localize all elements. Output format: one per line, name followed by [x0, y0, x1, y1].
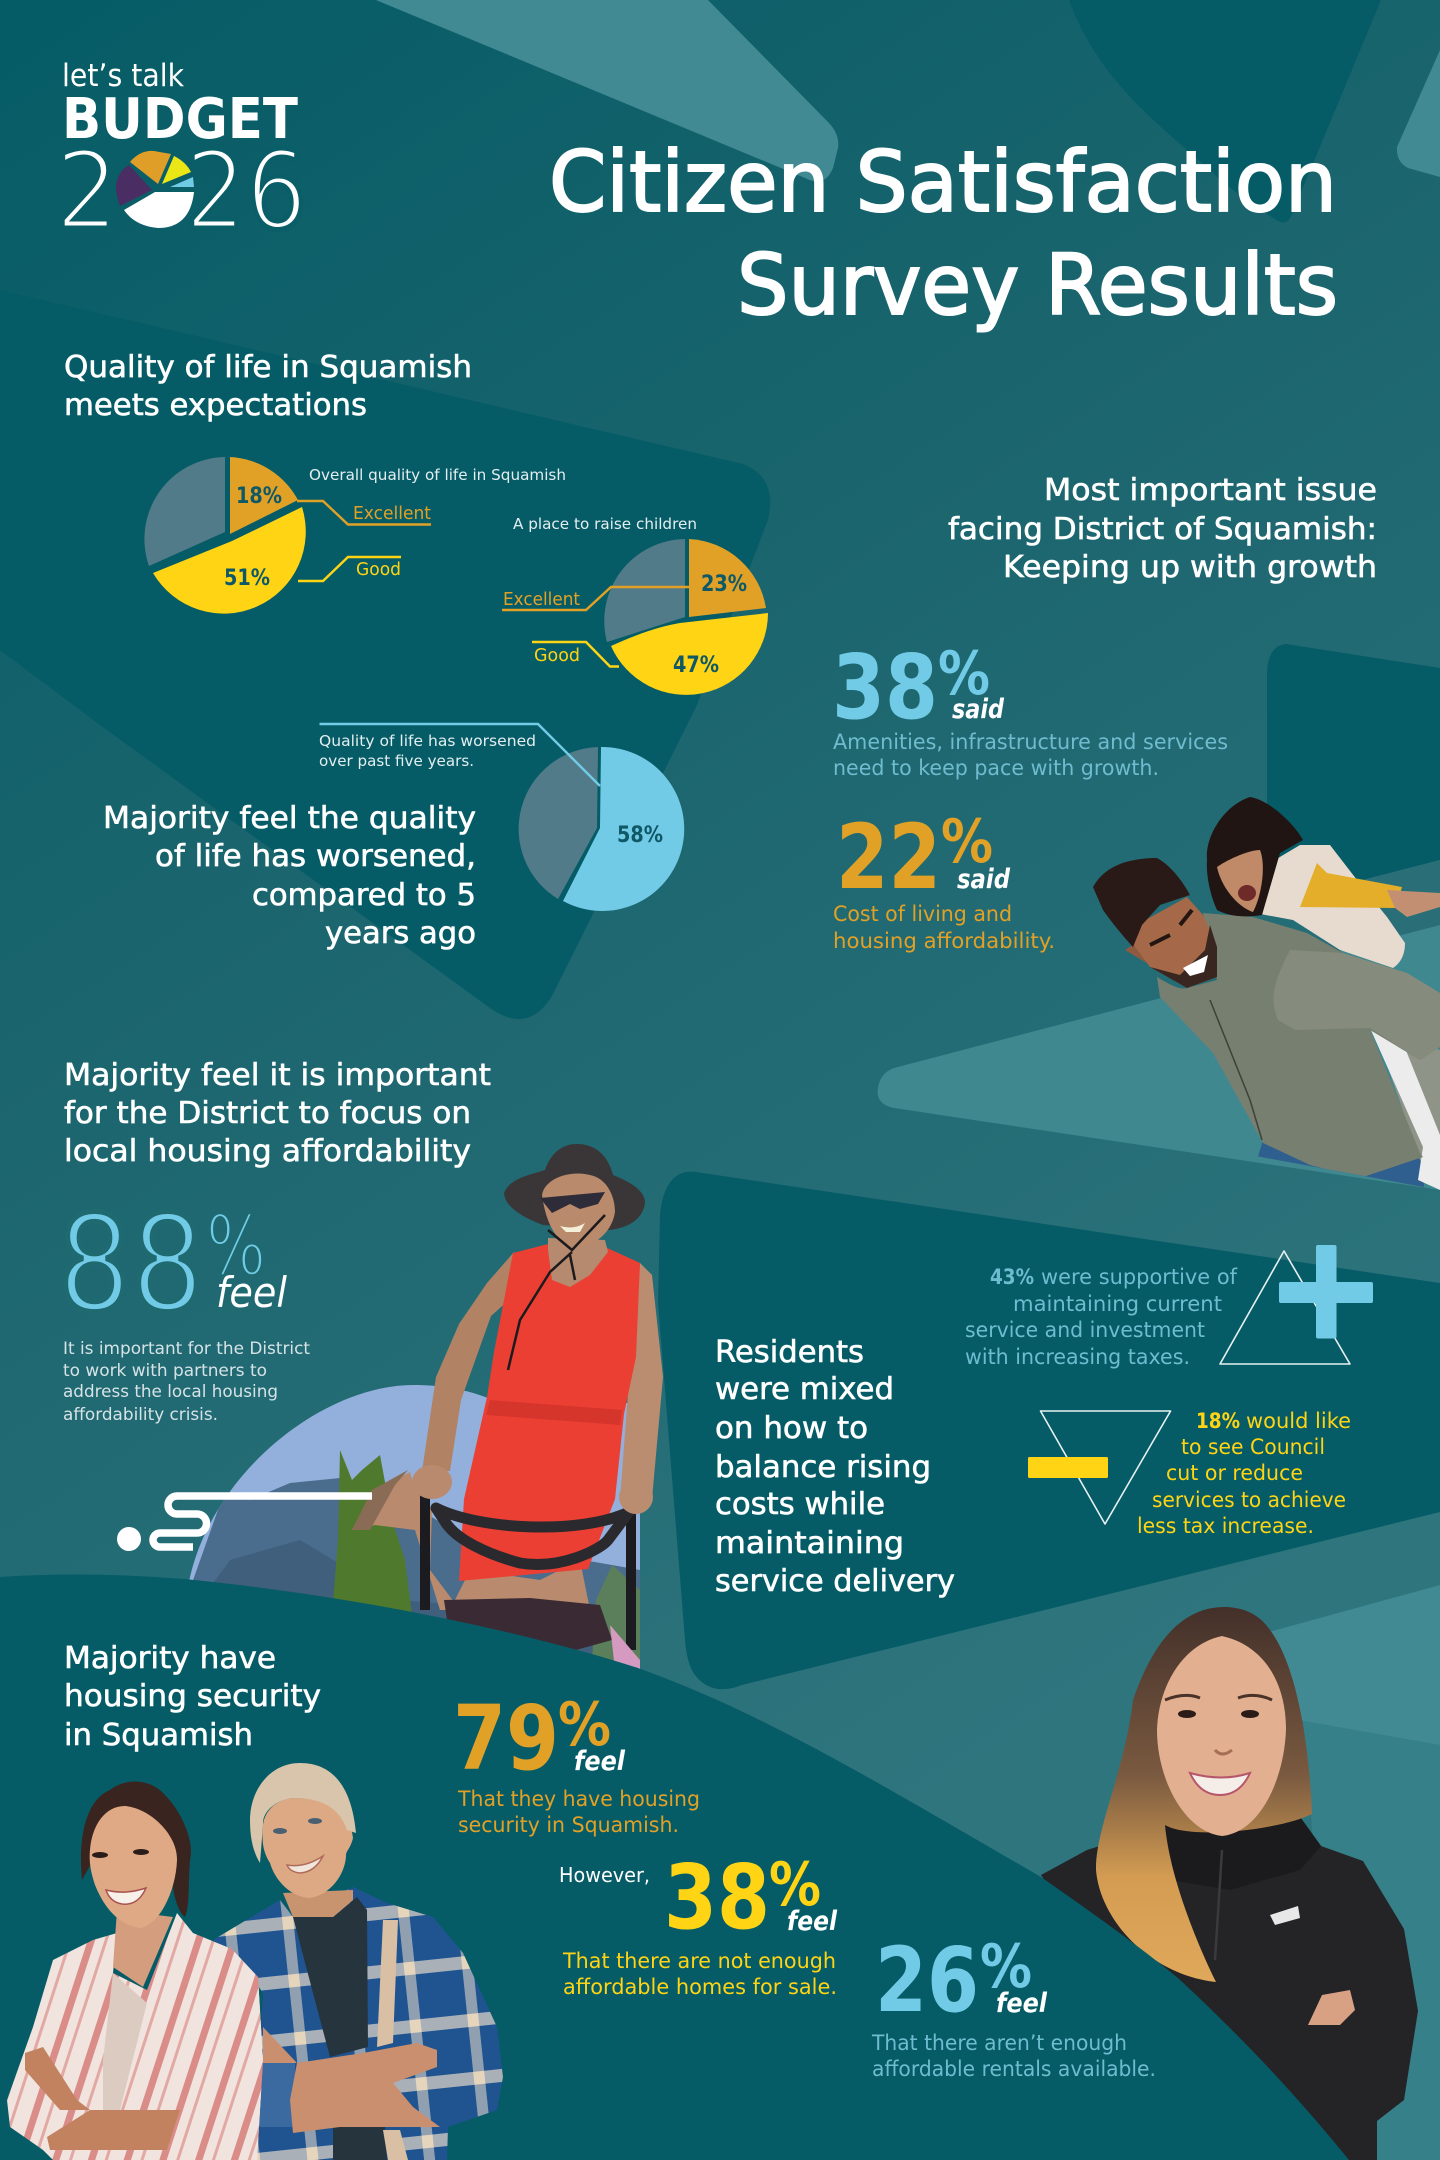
smile [560, 1223, 585, 1232]
chart: overall quality of life pie: 51% [224, 566, 270, 591]
chart: quality of life worsened pie [319, 724, 684, 911]
shape: top right light wedge [1397, 50, 1440, 177]
stat: 38% said: said [952, 694, 1005, 725]
title: Survey Results [737, 236, 1338, 334]
callout: 43% supportive: service and investment [965, 1318, 1205, 1342]
heading: most important issue [948, 473, 1377, 585]
nose shadow [1215, 1750, 1232, 1754]
heading: majority feel quality of life has worsened: Majority feel the quality [103, 801, 476, 836]
bottom dark wave panel [0, 1575, 1349, 2160]
stat: 26% feel [871, 1928, 1156, 2081]
heading: housing affordability focus: local housing affordability [64, 1134, 471, 1169]
shape: top light wedge [376, 0, 838, 181]
shape: top right dark wedge [1069, 0, 1381, 222]
chart: place to raise children pie: Good [534, 645, 580, 666]
hat cord [508, 1215, 605, 1370]
stat: 26% feel: feel [996, 1988, 1048, 2019]
woman's face [90, 1806, 177, 1928]
stat: 79% feel: feel [574, 1746, 626, 1777]
stat: 79% feel: security in Squamish. [458, 1813, 679, 1837]
hand [1308, 1990, 1355, 2025]
stat: 38% said: need to keep pace with growth. [833, 756, 1159, 780]
girl's vest [1255, 845, 1405, 968]
woman's neck [113, 1910, 173, 1987]
photo: father and daughter [1093, 797, 1440, 1190]
logo: let's talk budget 2026 [55, 58, 307, 254]
chart: quality of life worsened pie: 58% [617, 823, 663, 848]
heading: housing security: Majority have [64, 1641, 276, 1676]
stat: 22% said: housing affordability. [833, 929, 1055, 953]
man's shirt [1157, 913, 1440, 1178]
shape: right dark block [1267, 644, 1440, 905]
stat: however 38% feel [559, 1845, 838, 1999]
stat: however 38% feel: However, [559, 1863, 650, 1887]
woman's hair [81, 1782, 191, 1917]
stat: 26% feel: That there aren’t enough [871, 2031, 1127, 2055]
chart: overall quality of life pie: Good [356, 559, 401, 580]
shirt placket [377, 1920, 408, 2160]
woman's hand [25, 2047, 90, 2110]
callout: 43% supportive [965, 1265, 1238, 1369]
sunglasses [540, 1192, 605, 1213]
smile [1190, 1773, 1250, 1795]
neck and chest [548, 1238, 608, 1287]
stat: 38% said: % [938, 639, 990, 709]
shape: light wedge under stats [878, 925, 1440, 1190]
stat: 88% feel: feel [216, 1268, 287, 1317]
heading: majority feel quality of life has worsened: years ago [325, 916, 476, 951]
photo: woman in black hoodie [1041, 1607, 1418, 2160]
shape: quality of life dark panel [0, 290, 770, 1019]
callout: 18% cut or reduce: cut or reduce [1166, 1461, 1303, 1485]
man's t-shirt [293, 1897, 368, 2057]
stat: 22% said: Cost of living and [833, 902, 1012, 926]
heading: residents were mixed: costs while [715, 1487, 885, 1522]
shirt placket line [1210, 1000, 1262, 1140]
callout: 18% cut or reduce: to see Council [1181, 1435, 1325, 1459]
chart: quality of life worsened pie: Quality of life has worsened [319, 732, 536, 750]
stat: 22% said [833, 805, 1055, 953]
girl's hand [1387, 890, 1440, 917]
callout: 18% cut or reduce: less tax increase. [1137, 1514, 1314, 1538]
woman's tee [103, 1973, 147, 2110]
woman's forearm [47, 2110, 180, 2150]
drawstring [1215, 1850, 1222, 1960]
logo digits: 26: 26 [185, 129, 307, 254]
brows [1165, 1695, 1272, 1700]
heading: quality of life meets expectations [64, 350, 472, 423]
logo pie [116, 151, 194, 228]
eyes [1178, 1710, 1196, 1718]
man's neck [283, 1890, 353, 1917]
heading: housing affordability focus: Majority feel it is important [64, 1058, 491, 1093]
callout: 18% cut or reduce [1137, 1409, 1351, 1538]
dress waist shade [486, 1400, 622, 1425]
callout: 43% supportive: maintaining current [1013, 1292, 1222, 1316]
legs [450, 1560, 590, 1610]
man's sleeve highlight [1274, 950, 1440, 1060]
stat: 79% feel [453, 1686, 700, 1837]
girl's hair [1207, 797, 1303, 916]
logo mark [1270, 1906, 1300, 1925]
chart: overall quality of life pie: Excellent [353, 503, 431, 524]
stat: 88% feel: 88 [58, 1188, 204, 1342]
photo: woman and man with crossed arms [7, 1763, 503, 2160]
icon: minus in triangle [1028, 1411, 1171, 1524]
callout: 18% cut or reduce: would like [1246, 1409, 1351, 1433]
stat: 88% feel: % [206, 1197, 266, 1295]
title [549, 133, 1338, 334]
stat: however 38% feel: feel [787, 1906, 838, 1937]
heading: residents were mixed: service delivery [715, 1564, 955, 1599]
man's ear and face [1125, 945, 1148, 964]
heading: majority feel quality of life has worsened [103, 801, 476, 951]
chart: place to raise children pie: 47% [673, 653, 719, 678]
callout: 43% supportive: with increasing taxes. [965, 1345, 1190, 1369]
callout: 43% supportive: were supportive of [1041, 1265, 1238, 1289]
heading: majority feel quality of life has worsened: of life has worsened, [155, 839, 476, 874]
callout: 43% supportive: 43% [990, 1265, 1034, 1289]
stat: however 38% feel: That there are not enough [562, 1949, 836, 1973]
man's forearms [290, 2043, 440, 2133]
heading: housing security: in Squamish [64, 1718, 253, 1753]
stat: 79% feel: 79 [453, 1686, 559, 1790]
icon: white squiggle line and dot [117, 1496, 372, 1551]
stat: 38% said [832, 635, 1228, 780]
stat: however 38% feel: affordable homes for sale. [563, 1975, 837, 1999]
hoodie [1041, 1814, 1418, 2160]
man's smile [1183, 955, 1208, 976]
man's cuff and hand [257, 2063, 295, 2127]
stat: 88% feel: address the local housing [63, 1382, 278, 1402]
heading: housing security: housing security [64, 1679, 321, 1714]
sun hat [504, 1144, 645, 1230]
scenery: sky, mountains and trees [190, 1385, 640, 1660]
stat: 26% feel: affordable rentals available. [872, 2057, 1156, 2081]
heading: housing security [64, 1641, 321, 1753]
stat: 26% feel: 26 [875, 1928, 979, 2032]
face [1157, 1636, 1286, 1836]
arms [422, 1252, 520, 1471]
stat: 88% feel: affordability crisis. [63, 1405, 218, 1425]
heading: residents were mixed: Residents [715, 1335, 864, 1370]
heading: housing affordability focus: for the District to focus on [64, 1096, 471, 1131]
heading: majority feel quality of life has worsened: compared to 5 [252, 878, 476, 913]
heading: most important issue: Most important issue [1044, 473, 1377, 508]
man's eyes and smile [273, 1828, 287, 1834]
shape: lower right light wedge [1240, 1585, 1440, 1745]
chart: place to raise children pie: A place to raise children [513, 515, 697, 533]
girl's leg and shoe [1370, 1028, 1440, 1190]
girl's face [1217, 850, 1263, 912]
chart: overall quality of life pie: Overall quality of life in Squamish [309, 466, 566, 484]
callout: 18% cut or reduce: 18% [1196, 1409, 1240, 1433]
shape: lower right mid wedge [1303, 1721, 1440, 2160]
logo text: let's talk: let’s talk [62, 58, 184, 94]
man's beard [1150, 925, 1217, 988]
chart: place to raise children pie [502, 515, 768, 695]
raised foot [352, 1472, 460, 1610]
callout: 18% cut or reduce: services to achieve [1152, 1488, 1346, 1512]
shape: mid band right [1300, 860, 1440, 960]
hood [1165, 1814, 1321, 1890]
heading: housing affordability focus [64, 1058, 491, 1169]
stat: 88% feel [58, 1188, 310, 1425]
photo: woman with walker [186, 1144, 663, 1690]
heading: residents were mixed: were mixed [715, 1372, 894, 1407]
title: Citizen Satisfaction [549, 133, 1337, 231]
chart: overall quality of life pie: 18% [236, 484, 282, 509]
beanie [250, 1763, 356, 1863]
stat: 38% said: Amenities, infrastructure and services [833, 730, 1228, 754]
walker seat [444, 1598, 612, 1660]
long hair [1096, 1607, 1312, 1982]
jeans [1258, 1142, 1424, 1187]
walker frame [425, 1486, 631, 1650]
hands [412, 1465, 452, 1499]
shape: residents dark panel [658, 1172, 1440, 1689]
girl's open mouth [1238, 885, 1256, 901]
stat: 22% said: % [941, 807, 993, 877]
heading: quality of life meets expectations: Quality of life in Squamish [64, 350, 472, 385]
man's back behind leg [1389, 1049, 1440, 1162]
chart: place to raise children pie: 23% [701, 572, 747, 597]
girl's shirt sleeve [1300, 863, 1402, 908]
face [542, 1174, 615, 1247]
stat: 38% said: 38 [832, 635, 938, 739]
man's face [263, 1798, 353, 1898]
heading: quality of life meets expectations: meets expectations [64, 388, 367, 423]
man's brows [1150, 910, 1192, 945]
logo text: budget: BUDGET [62, 87, 298, 152]
woman's sleeve [120, 1947, 263, 2160]
stat: 79% feel: % [558, 1690, 611, 1760]
heading: most important issue: Keeping up with growth [1003, 550, 1377, 585]
icon: plus in triangle [1220, 1245, 1373, 1364]
heading: residents were mixed: on how to [715, 1411, 868, 1446]
stat: 79% feel: That they have housing [457, 1787, 700, 1811]
stat: 26% feel: % [980, 1932, 1032, 2002]
heading: most important issue: facing District of Squamish: [948, 512, 1377, 547]
heading: residents were mixed: maintaining [715, 1526, 904, 1561]
red dress [459, 1244, 640, 1581]
woman's striped shirt [7, 1913, 263, 2160]
stat: however 38% feel: % [769, 1850, 821, 1920]
logo digit: 2: 2 [55, 129, 119, 254]
heading: residents were mixed [715, 1335, 955, 1599]
stat: 88% feel: It is important for the District [63, 1339, 310, 1359]
chart: place to raise children pie: Excellent [503, 589, 580, 610]
man's hair [1093, 858, 1190, 947]
stat: 22% said: 22 [836, 805, 941, 909]
chart: overall quality of life pie [144, 457, 566, 614]
heading: residents were mixed: balance rising [715, 1450, 931, 1485]
stat: 22% said: said [957, 864, 1011, 895]
woman's eyes and smile [92, 1852, 108, 1858]
chart: quality of life worsened pie: over past five years. [319, 752, 474, 770]
stat: 88% feel: to work with partners to [63, 1361, 267, 1381]
stat: however 38% feel: 38 [664, 1845, 770, 1949]
man's plaid shirt [213, 1887, 503, 2160]
